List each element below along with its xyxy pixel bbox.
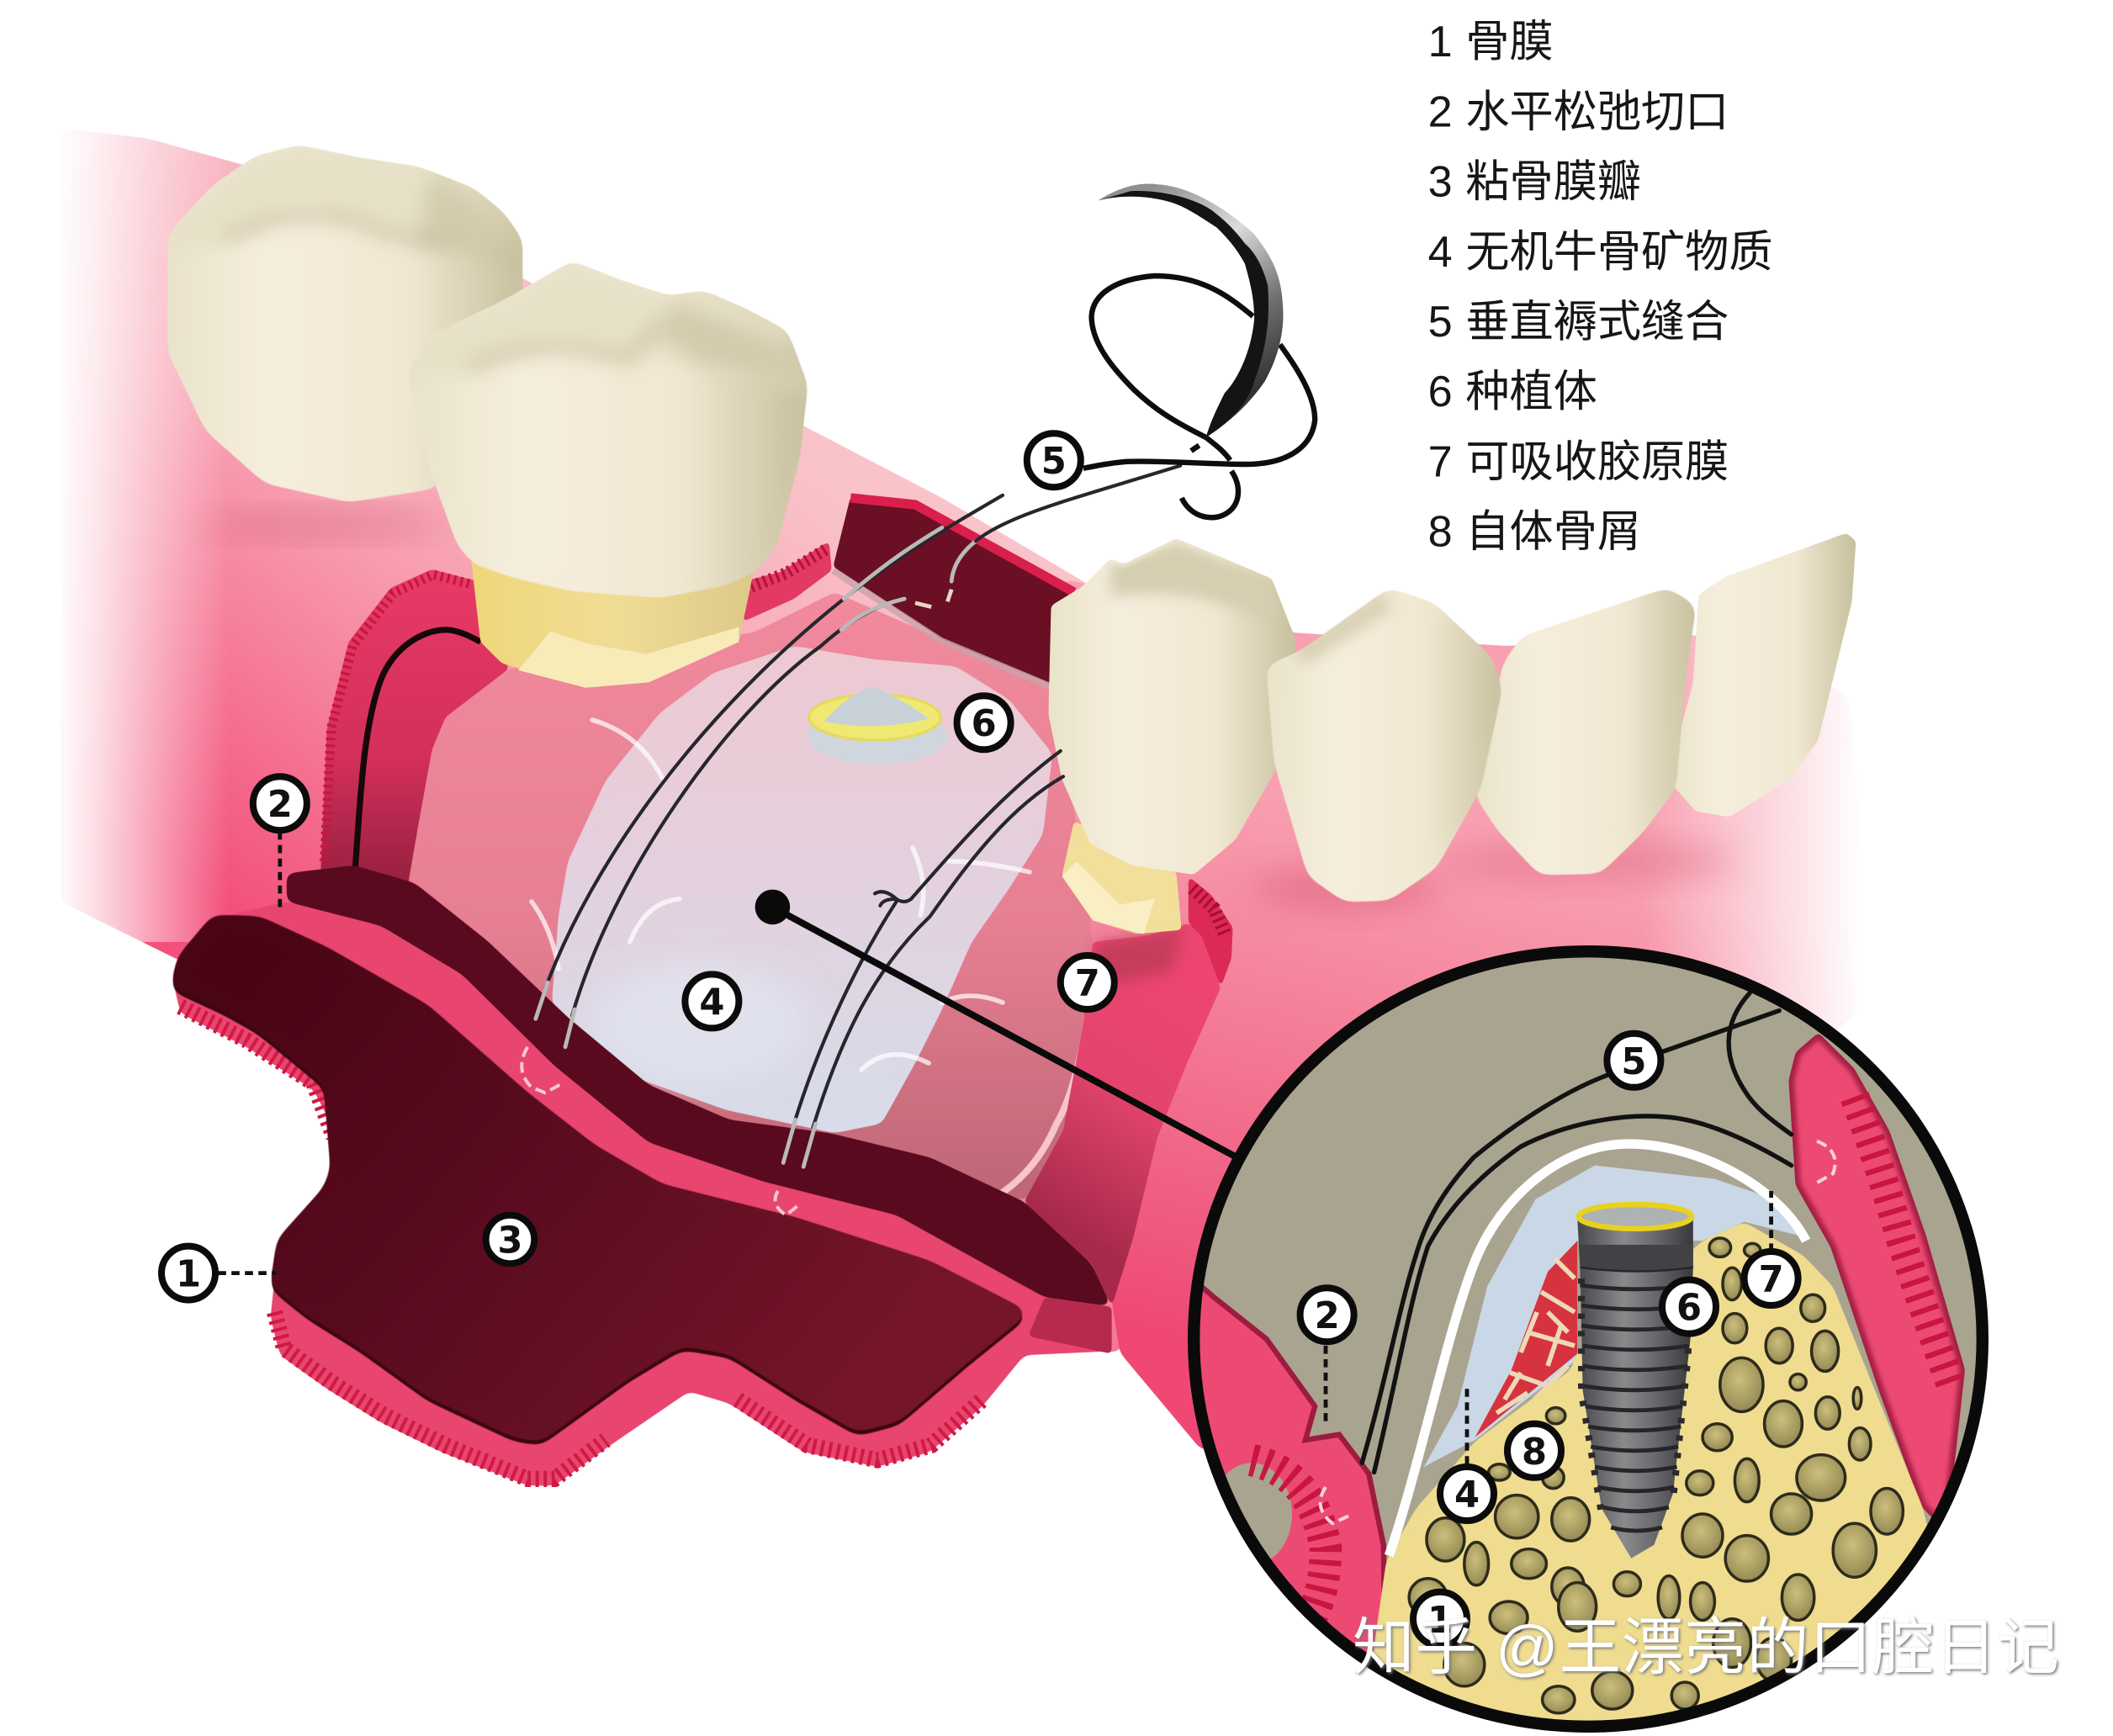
legend: 自体骨屑	[1465, 508, 1641, 557]
legend: 1	[1428, 18, 1453, 66]
graft region in inset	[1424, 1166, 1798, 1467]
marker 3	[486, 1215, 534, 1263]
inset marker 7: 7	[1759, 1259, 1784, 1301]
marker 5	[1027, 433, 1081, 487]
suture lines in inset	[1362, 993, 1792, 1472]
autogenous bone chips	[1475, 1241, 1577, 1437]
bone pores	[1409, 1238, 1903, 1713]
leader from site to magnified view	[755, 890, 1252, 1166]
marker 4: 4	[699, 982, 724, 1024]
legend: 8	[1428, 508, 1453, 557]
inset marker 8	[1507, 1424, 1561, 1478]
tooth: incisor group	[1267, 533, 1856, 902]
sutures right pair	[783, 751, 1063, 1167]
tooth: front molar	[404, 256, 821, 597]
marker 6: 6	[972, 703, 997, 745]
surgical needle and thread	[1083, 183, 1315, 517]
back flap	[743, 496, 1074, 689]
inset marker 2	[1300, 1288, 1354, 1342]
marker 7: 7	[1075, 963, 1100, 1005]
legend: 粘骨膜瓣	[1465, 158, 1641, 207]
inset marker 4	[1440, 1467, 1494, 1521]
legend: 4	[1428, 228, 1453, 277]
inset marker 1: 1	[1427, 1600, 1453, 1642]
watermark: 知乎 @王漂亮的口腔日记	[1353, 1612, 2059, 1682]
marker 4	[685, 974, 739, 1028]
inset marker 2: 2	[1315, 1295, 1340, 1337]
4 graft material	[532, 646, 1052, 1133]
abutment under premolar	[1062, 821, 1182, 934]
inset marker 5	[1607, 1034, 1660, 1088]
marker 1	[162, 1246, 215, 1300]
left gum in inset	[1199, 1285, 1386, 1653]
tooth: back molar	[162, 135, 525, 502]
marker 2	[253, 776, 307, 830]
right gum in inset	[1792, 1036, 1962, 1527]
marker 3: 3	[497, 1220, 522, 1262]
legend: 无机牛骨矿物质	[1465, 228, 1772, 277]
marker 2: 2	[267, 784, 293, 826]
bone in inset	[1373, 1223, 1927, 1721]
inset marker 1	[1413, 1592, 1467, 1646]
lower flap with rim	[171, 865, 1112, 1485]
implant fixture	[1577, 1204, 1693, 1559]
dashed leaders main view	[218, 832, 280, 1273]
legend	[1428, 18, 1772, 557]
legend: 2	[1428, 87, 1453, 136]
magnified cross-section inset	[1157, 951, 1983, 1736]
marker 7	[1061, 955, 1115, 1009]
abutment under tooth	[471, 558, 756, 688]
membrane arch in inset	[1389, 1144, 1806, 1556]
membrane outline	[998, 1003, 1090, 1195]
sutures left pair	[536, 466, 1180, 1047]
legend: 5	[1428, 298, 1453, 347]
inset marker 6: 6	[1676, 1288, 1702, 1330]
legend: 7	[1428, 437, 1453, 486]
marker 1: 1	[176, 1254, 201, 1296]
right flap strip	[1025, 876, 1233, 1307]
legend: 6	[1428, 368, 1453, 416]
legend: 可吸收胶原膜	[1465, 437, 1729, 486]
legend: 水平松弛切口	[1465, 87, 1729, 136]
tooth: premolar	[1048, 538, 1296, 875]
inset marker 7	[1745, 1252, 1798, 1305]
gum tissue band	[40, 108, 1918, 1451]
legend: 种植体	[1465, 368, 1597, 416]
exposed surgical site under membrane	[408, 592, 1093, 1202]
inset marker 4: 4	[1454, 1474, 1480, 1516]
marker 5: 5	[1041, 441, 1067, 483]
6 implant top	[808, 686, 947, 765]
dashed leaders in inset	[1326, 1191, 1771, 1464]
inset marker 5: 5	[1621, 1041, 1646, 1083]
inset marker 8: 8	[1522, 1432, 1547, 1474]
legend: 3	[1428, 158, 1453, 207]
marker 6	[957, 696, 1011, 749]
legend: 垂直褥式缝合	[1465, 298, 1729, 347]
left flap wall	[320, 569, 509, 886]
legend: 骨膜	[1465, 18, 1554, 66]
inset marker 6	[1662, 1280, 1716, 1334]
